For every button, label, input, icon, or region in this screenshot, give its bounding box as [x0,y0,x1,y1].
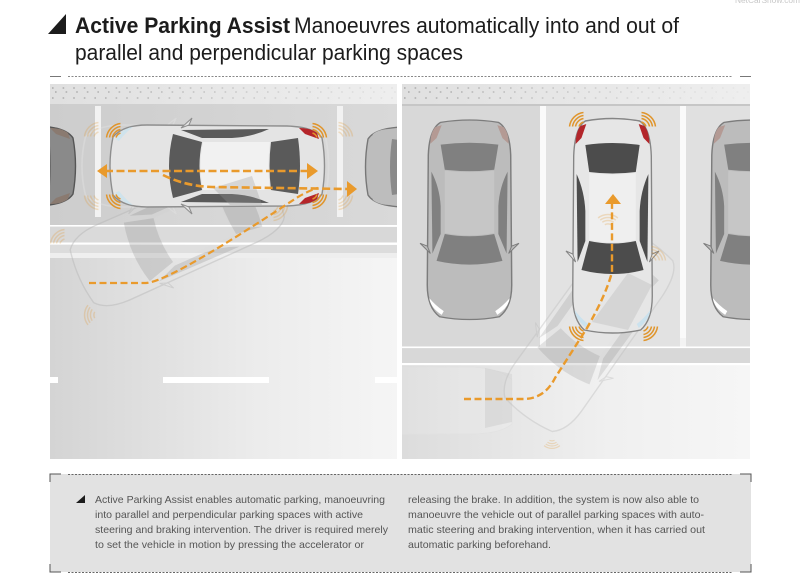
parking lane [50,104,397,225]
text: left column: into parallel and perpendicular parking spaces with active [95,509,363,521]
parking bays [444,106,540,346]
parked car left [420,120,519,320]
road centre markings [50,377,397,383]
main car [566,118,659,333]
panel: perpendicular parking [402,84,750,459]
ghost car entering [70,207,285,306]
title: Active Parking Assist [75,13,291,38]
arrow: forward and reverse [97,163,318,179]
sensor fans [50,122,352,325]
ghost car forward [82,126,138,208]
panel: description [50,474,751,572]
parked car right [703,119,750,320]
icon: title triangle [48,14,66,34]
access band [444,348,750,363]
text: left column: steering and braking intervention. The driver is required merely [95,524,389,536]
bay markings [540,106,546,346]
pavement [402,84,750,104]
text: right column: manoeuvre the vehicle out of parallel parking spaces with auto- [408,509,704,521]
text: left column: Active Parking Assist enables automatic parking, manoeuvring [95,494,385,506]
ghost shadow over hood [592,273,652,330]
parked car left [50,126,76,206]
text: right column: releasing the brake. In addition, the system is now also able to [408,494,699,506]
text: right column: matic steering and braking intervention, when it has carried out [408,524,705,536]
arrow: parking path [89,175,357,283]
ghost car horizontal [485,368,512,428]
parking markings [95,106,343,217]
sensor fans [544,112,666,454]
text: left column: to set the vehicle in motion by pressing the accelerator or [95,539,365,551]
icon: text triangle [76,495,85,503]
main car [110,118,324,214]
panel: parallel parking [50,84,397,459]
text: left column [95,494,389,551]
pavement [50,84,103,104]
text: right column: automatic parking beforehand. [408,539,551,551]
text: right column [408,494,705,551]
title [48,13,680,65]
ghost car turning [504,242,674,432]
ghost overlay on main car [213,176,262,205]
title: Manoeuvres automatically into and out of [294,13,680,38]
title: parallel and perpendicular parking spaces [75,40,463,65]
arrow: exit path [464,194,621,399]
parked car right [364,126,397,208]
